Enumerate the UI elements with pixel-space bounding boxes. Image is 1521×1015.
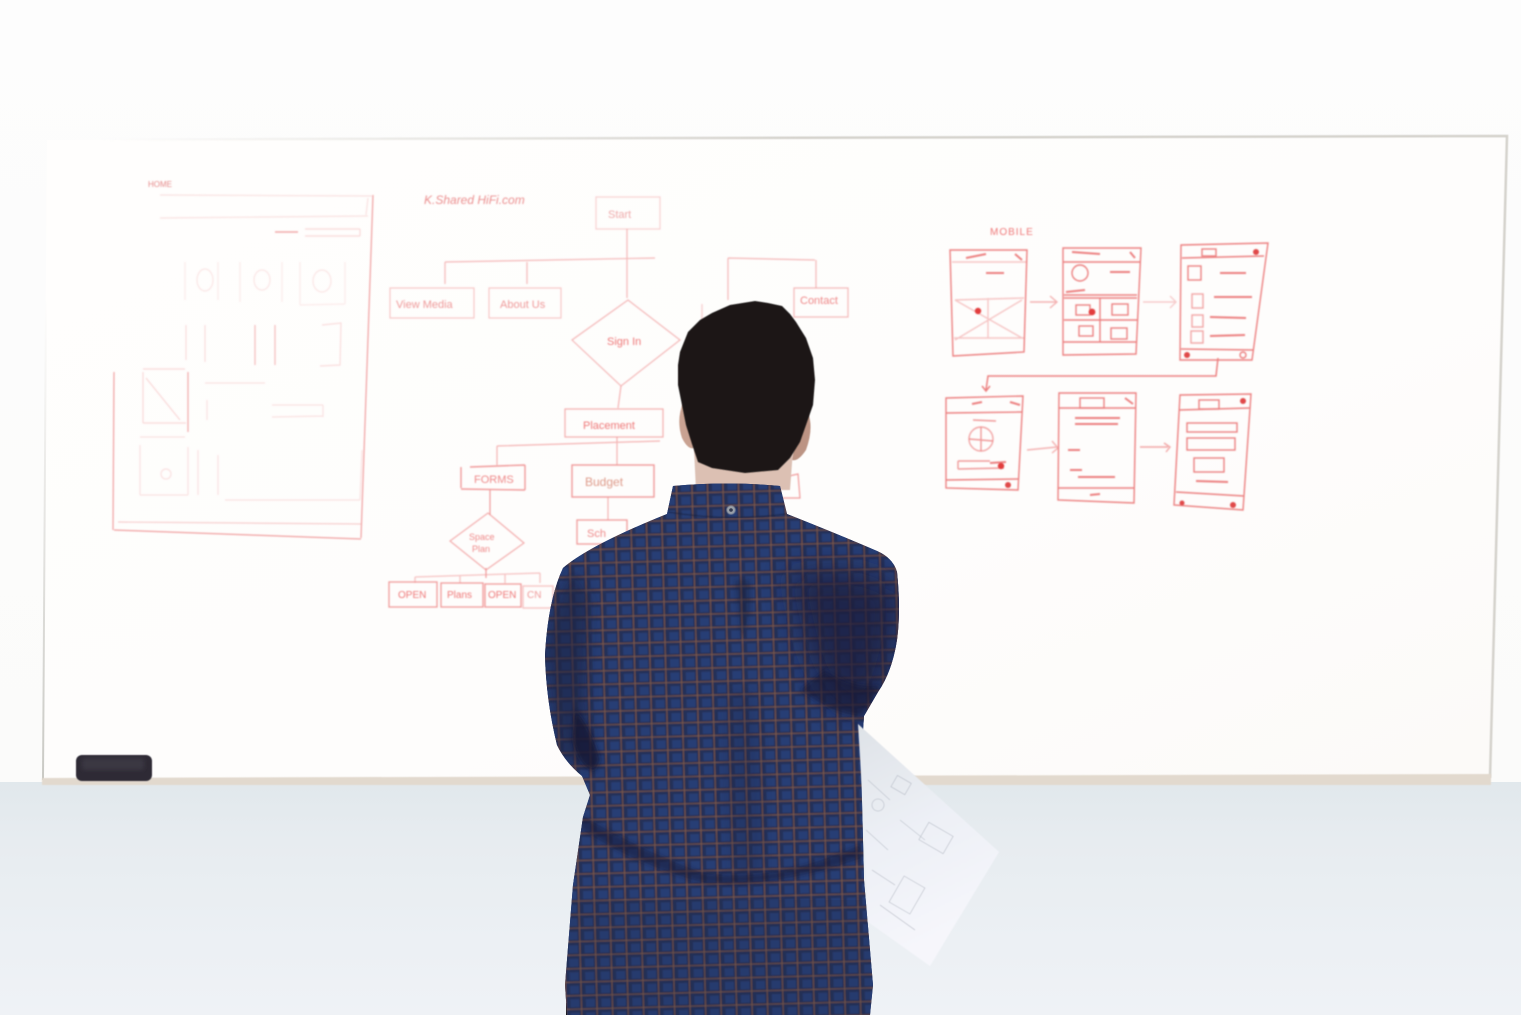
small diamond: Plan	[472, 544, 490, 554]
arrow 1 to 2	[1030, 296, 1057, 308]
wall below whiteboard	[0, 782, 1521, 1015]
screen 6	[1174, 394, 1251, 510]
collar button	[726, 506, 736, 514]
forms box: FORMS	[474, 474, 514, 486]
view media box: View Media	[396, 299, 454, 311]
lower shirt shade	[570, 900, 870, 1015]
whiteboard frame left	[43, 300, 46, 780]
neck	[694, 450, 793, 490]
about box	[489, 288, 561, 318]
whiteboard	[42, 136, 1507, 785]
page label: HOME	[148, 180, 172, 189]
dashboard box	[565, 409, 663, 437]
option boxes row: Plans	[447, 590, 472, 601]
about box: About Us	[500, 299, 546, 311]
contact box	[794, 288, 848, 317]
sketch: left page wireframe	[113, 180, 373, 539]
paper sketches	[866, 775, 953, 930]
lower box	[577, 520, 627, 544]
contact box: Contact	[800, 295, 838, 307]
option boxes row: OPEN	[488, 590, 516, 601]
hair	[678, 301, 815, 473]
sleeve crease left	[573, 710, 600, 770]
eraser	[76, 755, 152, 781]
dashboard box: Placement	[583, 420, 635, 432]
screen 4	[946, 396, 1023, 490]
sketch: site map flowchart	[389, 193, 848, 608]
option boxes row	[389, 573, 553, 608]
decision diamond: Sign In	[607, 336, 641, 348]
overall shirt darkening	[530, 470, 910, 1015]
start box	[596, 197, 660, 229]
budget box	[572, 465, 654, 497]
right arm crease	[800, 670, 880, 716]
shirt	[530, 470, 910, 1015]
arrow 2 to 3	[1143, 296, 1176, 308]
whiteboard tray bottom	[42, 774, 1491, 785]
right ear	[792, 413, 811, 460]
option boxes row: OPEN	[398, 590, 426, 601]
forms box	[461, 465, 525, 490]
man	[530, 301, 999, 1015]
start box: Start	[608, 209, 631, 221]
right sleeve shadow	[790, 570, 898, 715]
waist shadow fold	[580, 815, 862, 884]
view media box	[390, 288, 474, 318]
arrow 5 to 6	[1140, 443, 1170, 452]
back vertical fold	[728, 693, 759, 874]
mobile label: MOBILE	[990, 227, 1034, 238]
left ear	[679, 403, 694, 448]
paper held under arm	[858, 724, 999, 966]
pants at bottom	[566, 1003, 870, 1015]
screen 2	[1063, 248, 1141, 355]
screen 1	[950, 250, 1027, 356]
connector from row 1 to row 2	[982, 358, 1218, 391]
flowchart title: K.Shared HiFi.com	[424, 193, 525, 207]
collar line	[668, 512, 786, 518]
back center pleat	[735, 580, 750, 640]
sketch: mobile wireframes	[946, 227, 1268, 510]
arrow 4 to 5	[1027, 441, 1058, 453]
budget box: Budget	[585, 475, 624, 489]
option boxes row: CN	[527, 590, 541, 601]
small diamond	[450, 513, 524, 570]
whiteboard frame top and right	[100, 136, 1507, 778]
decision diamond	[572, 300, 680, 386]
screen 5	[1058, 393, 1136, 503]
partial box behind man	[780, 474, 800, 498]
screen 3	[1180, 243, 1268, 360]
small diamond: Space	[469, 532, 495, 542]
left sleeve shadow	[545, 570, 595, 770]
wall above whiteboard	[0, 0, 1521, 790]
lower box: Sch	[587, 528, 606, 540]
